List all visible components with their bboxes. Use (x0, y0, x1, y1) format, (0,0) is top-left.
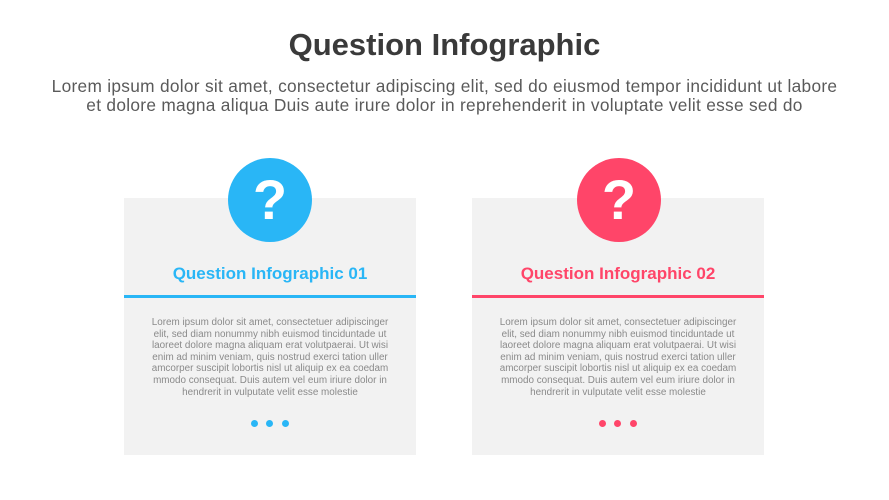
body text 01: hendrerit in vulputate velit esse molestie (182, 387, 358, 398)
body text 01: elit, sed diam nonummy nibh euismod tinciduntade ut (154, 329, 386, 340)
body text 01: laoreet dolore magna aliquam erat volutpaerai. Ut wisi (152, 340, 388, 351)
body text 01: amcorper suscipit lobortis nisl ut aliquip ex ea coedam (152, 363, 388, 374)
panel: question 01 (124, 158, 416, 455)
body text 02: Lorem ipsum dolor sit amet, consectetuer adipiscinger (500, 317, 736, 328)
body text 01: Lorem ipsum dolor sit amet, consectetuer adipiscinger (152, 317, 388, 328)
subtitle (52, 76, 837, 115)
body text 02: enim ad minim veniam, quis nostrud exerci tation uller (500, 352, 736, 363)
icon: blue question circle (228, 158, 312, 242)
body text 01: enim ad minim veniam, quis nostrud exerci tation uller (152, 352, 388, 363)
dots 01 (251, 420, 289, 427)
heading 01: Question Infographic 01 (173, 264, 367, 283)
body text 01 (152, 317, 388, 398)
icon: blue question circle: ? (253, 168, 287, 231)
dots 02 (599, 420, 637, 427)
body text 02 (500, 317, 736, 398)
body text 01: mmodo consequat. Duis autem vel eum iriure dolor in (153, 375, 387, 386)
title: Question Infographic (289, 27, 600, 62)
icon: red question circle (577, 158, 661, 242)
subtitle: Lorem ipsum dolor sit amet, consectetur adipiscing elit, sed do eiusmod tempor incididunt ut labore (52, 76, 837, 96)
icon: red question circle: ? (602, 168, 636, 231)
body text 02: elit, sed diam nonummy nibh euismod tinciduntade ut (502, 329, 734, 340)
panel: question 02 (472, 158, 764, 455)
body text 02: laoreet dolore magna aliquam erat volutpaerai. Ut wisi (500, 340, 736, 351)
body text 02: hendrerit in vulputate velit esse molestie (530, 387, 706, 398)
subtitle: et dolore magna aliqua Duis aute irure dolor in reprehenderit in voluptate velit esse sed do (86, 95, 803, 115)
heading 02: Question Infographic 02 (521, 264, 715, 283)
body text 02: amcorper suscipit lobortis nisl ut aliquip ex ea coedam (500, 363, 736, 374)
body text 02: mmodo consequat. Duis autem vel eum iriure dolor in (501, 375, 735, 386)
